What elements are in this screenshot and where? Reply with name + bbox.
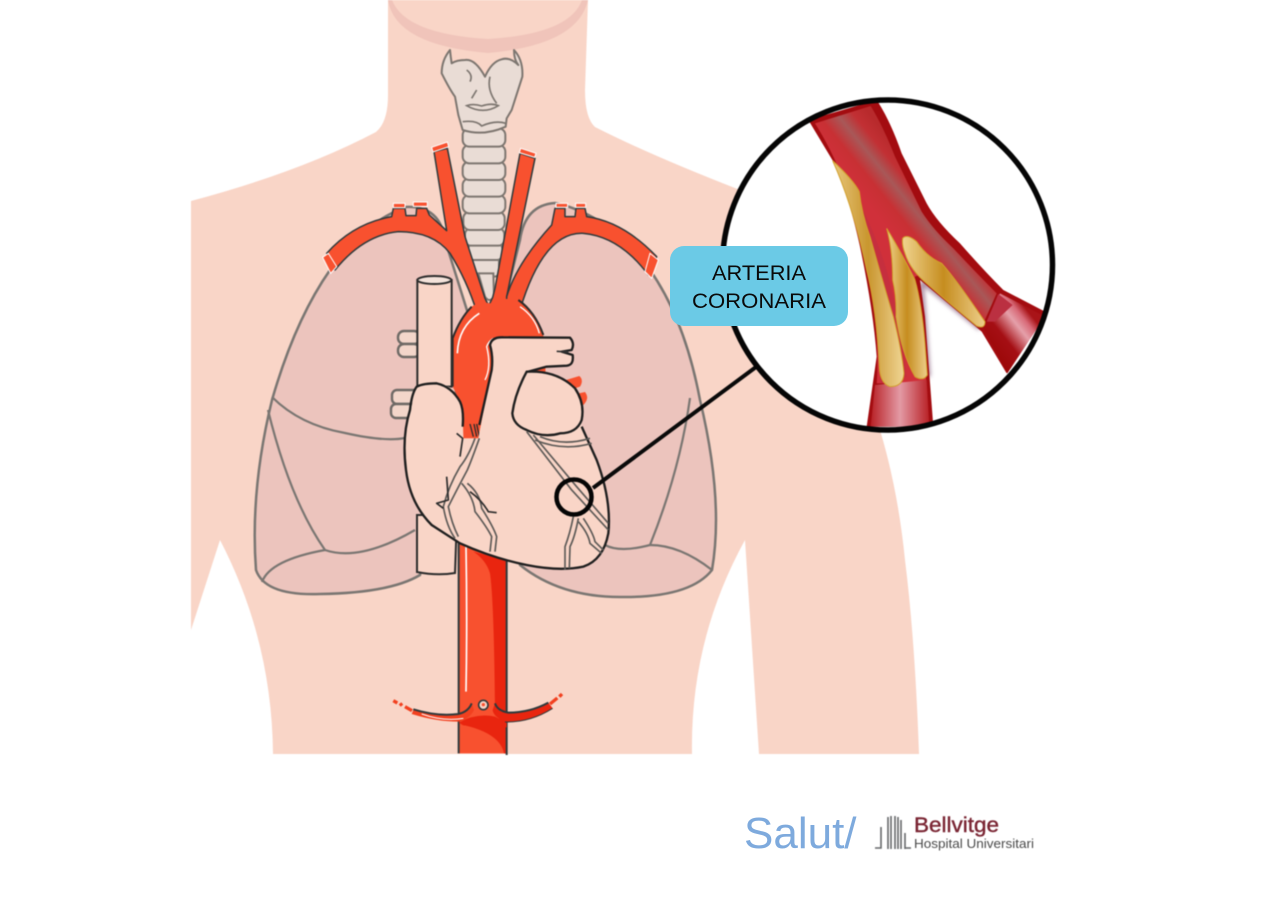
logo building mark [875, 816, 911, 849]
artery wall [808, 100, 1045, 427]
larynx and trachea [442, 50, 522, 300]
heart body [405, 337, 609, 569]
infographic: chest anatomy with coronary artery detail [190, 0, 1056, 852]
neck and subclavian arteries [323, 142, 658, 312]
right lung [500, 203, 716, 597]
aortic arch [453, 298, 546, 438]
diaphragm arteries [393, 694, 562, 727]
label: arteria coronaria: ARTERIA [712, 261, 807, 285]
small magnifier ring [556, 480, 592, 514]
inferior vena cava [417, 515, 457, 574]
magnified lens [722, 100, 1052, 430]
logo: Bellvitge Hospital Universitari [875, 813, 1034, 851]
logo: Salut: Salut/ [744, 809, 857, 858]
body silhouette [191, 0, 919, 754]
lung fissures [262, 397, 712, 582]
bronchi stubs [391, 331, 422, 418]
heart [405, 337, 609, 570]
superior vena cava [417, 276, 452, 387]
pulmonary veins [564, 376, 587, 405]
right carotid and subclavian [327, 148, 490, 312]
left subclavian [507, 208, 657, 310]
left carotid [487, 153, 535, 310]
chin shadow [388, 0, 588, 53]
label: arteria coronaria: CORONARIA [692, 289, 827, 313]
heart outline [405, 337, 609, 569]
crotch shadow [922, 282, 980, 377]
cut artery ends [323, 142, 658, 278]
lower trunk stub [871, 380, 929, 427]
logo: Bellvitge Hospital Universitari: Bellvitge [914, 813, 999, 837]
logo: Bellvitge Hospital Universitari: Hospital Universitari [914, 837, 1034, 851]
coronary artery with plaque [808, 100, 1045, 427]
anatomical illustration [191, 0, 1052, 755]
left atrial appendage [512, 372, 582, 435]
descending aorta [459, 540, 507, 755]
branch stub [994, 293, 1041, 374]
coronary vessels [437, 432, 608, 570]
plaque center [887, 228, 927, 379]
leader line [593, 367, 756, 488]
plaque right [902, 236, 985, 327]
left lung [255, 207, 470, 594]
label: arteria coronaria [670, 246, 848, 326]
artery lumen [815, 106, 997, 383]
plaque left [833, 161, 904, 387]
